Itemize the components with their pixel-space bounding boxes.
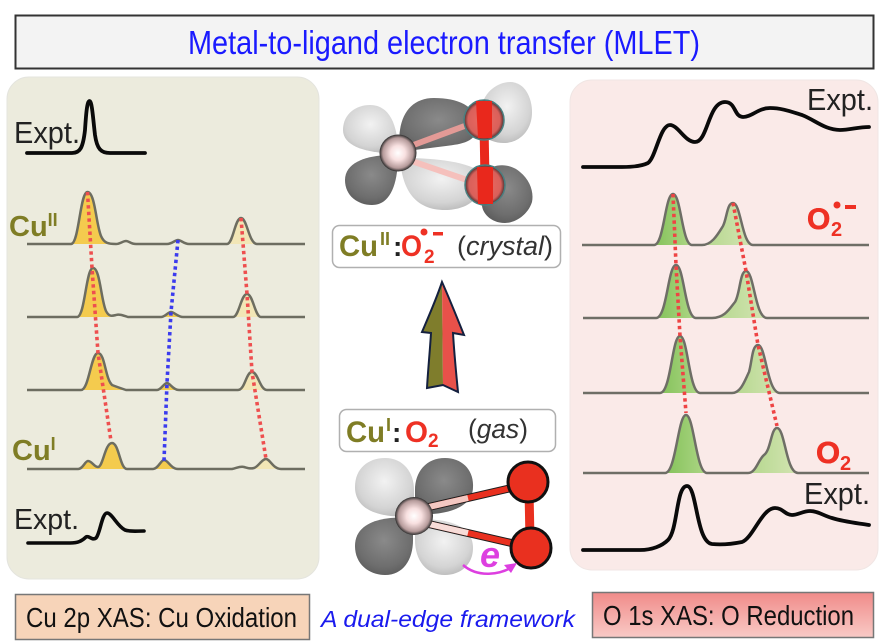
dotted guide: second peak [733, 203, 777, 426]
experimental O 1s spectrum, bottom [583, 486, 869, 550]
trace 3 fills [660, 336, 780, 393]
trace 1 [582, 194, 869, 245]
label: dioxygen: 2 [840, 453, 851, 475]
bond: Cu-O upper [420, 486, 520, 509]
label: Cu I: I [51, 434, 56, 454]
atom: Cu [395, 497, 433, 535]
label: superoxide: O [807, 203, 830, 236]
trace 2 [583, 265, 869, 318]
title: Metal-to-ligand electron transfer (MLET) [188, 24, 700, 61]
label box: crystal state: II [380, 229, 390, 249]
label box: crystal state: (crystal) [457, 231, 553, 261]
panel: Cu 2p XAS spectra [7, 77, 319, 579]
trace 3 [27, 353, 305, 390]
label box: gas state: I [386, 415, 391, 435]
label box: crystal state: 2 [424, 247, 435, 268]
atom: O upper [508, 462, 548, 502]
experimental Cu 2p spectrum, bottom [28, 513, 144, 543]
molecule: crystal Cu(II):O2 superoxide orbitals [343, 82, 532, 223]
dotted guide: blue [164, 240, 178, 461]
label: dioxygen: O [816, 435, 840, 470]
trace 1 fills [71, 192, 257, 244]
arrow: gas to crystal [422, 282, 464, 392]
label box: gas state: Cu [346, 416, 385, 449]
label: Cu I: Cu [12, 435, 51, 467]
label: top Expt.: Expt. [14, 115, 80, 150]
label box: gas state: : [392, 417, 401, 448]
label: top Expt.: Expt. [807, 82, 873, 117]
electron transfer arrow [463, 534, 517, 575]
electron transfer arrow: e [480, 534, 500, 575]
trace 4 [27, 443, 305, 469]
dotted guide: red, first peak [88, 192, 111, 441]
label: dioxygen [816, 435, 851, 475]
bond: Cu-O upper [400, 124, 470, 150]
atom: O upper [464, 100, 504, 140]
trace 4 fills [665, 415, 798, 473]
caption: O 1s XAS [592, 592, 874, 638]
trace 3 [583, 336, 869, 393]
bond: O-O [484, 125, 485, 180]
label: superoxide: 2 [831, 219, 842, 241]
molecule: gas Cu(I):O2 orbitals [355, 458, 551, 575]
label: Cu II: Cu [9, 211, 48, 243]
label: bottom Expt.: Expt. [804, 476, 870, 511]
trace 4 fills [78, 443, 281, 469]
experimental Cu 2p spectrum, top [27, 101, 145, 153]
label box: crystal state: : [393, 231, 402, 262]
label box: crystal state: Cu [339, 230, 378, 263]
label box: gas state: (gas) [468, 414, 528, 444]
atom: O lower [465, 165, 505, 205]
atom: Cu [380, 134, 416, 172]
trace 4 [583, 415, 869, 473]
panel: O 1s XAS spectra [570, 80, 878, 570]
label box: crystal state: O [401, 230, 422, 263]
caption: Cu 2p XAS [16, 594, 310, 640]
dotted guide: first peak [673, 194, 686, 413]
experimental O 1s spectrum, top [583, 102, 869, 167]
trace 2 [27, 268, 305, 317]
label box: gas state [340, 410, 556, 452]
caption: dual-edge framework: A dual-edge framework [319, 606, 577, 632]
label: Cu II: II [48, 210, 58, 230]
label box: gas state: 2 [428, 431, 439, 452]
trace 1 fills [654, 194, 753, 245]
trace 2 fills [77, 268, 261, 317]
bond: O-O [529, 490, 530, 540]
atom: O lower [511, 528, 551, 568]
bond: Cu-O lower [400, 157, 470, 181]
label box: crystal state [332, 226, 560, 268]
label: superoxide [807, 202, 856, 241]
label box: gas state: O [405, 416, 428, 449]
bond: Cu-O lower [420, 522, 520, 545]
title [16, 16, 874, 68]
dotted guide: red, last peak [241, 218, 266, 459]
label: bottom Expt.: Expt. [14, 504, 79, 536]
trace 2 fills [656, 265, 767, 318]
trace 1 [27, 192, 305, 244]
caption: Cu 2p XAS: Cu 2p XAS: Cu Oxidation [26, 602, 297, 633]
trace 3 fills [81, 353, 267, 390]
